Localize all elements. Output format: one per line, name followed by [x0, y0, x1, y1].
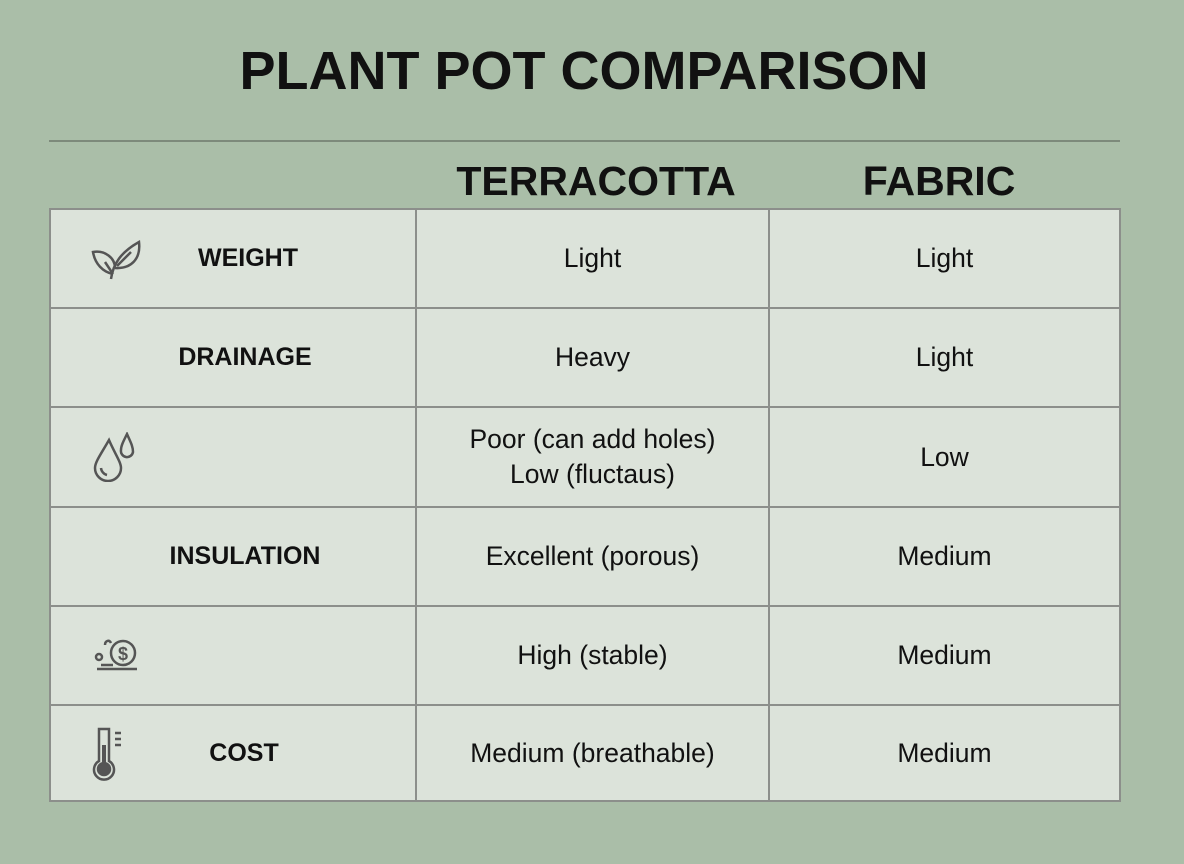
comparison table: Low (fluctaus)	[510, 459, 675, 489]
comparison table: Heavy	[555, 342, 630, 372]
comparison table: Light	[916, 342, 973, 372]
comparison table: Medium	[897, 640, 992, 670]
comparison table: WEIGHT	[198, 244, 298, 272]
title: PLANT POT COMPARISON	[239, 41, 928, 101]
icon: water drops	[94, 432, 134, 482]
comparison table: Medium (breathable)	[470, 738, 715, 768]
comparison table	[49, 208, 1121, 802]
icon: thermometer	[92, 728, 121, 781]
icon: coin: $	[118, 644, 128, 664]
comparison table: Light	[564, 243, 621, 273]
comparison table: Poor (can add holes)	[469, 424, 716, 454]
comparison table: DRAINAGE	[178, 343, 312, 371]
comparison table: High (stable)	[517, 640, 668, 670]
icon: coin	[94, 640, 137, 670]
comparison table: Excellent (porous)	[486, 541, 699, 571]
comparison table: Medium	[897, 738, 992, 768]
comparison table: COST	[209, 738, 279, 766]
comparison table: INSULATION	[170, 542, 320, 570]
column header: fabric: FABRIC	[863, 158, 1015, 204]
comparison table: Medium	[897, 541, 992, 571]
column header: terracotta: TERRACOTTA	[456, 158, 736, 204]
comparison table: Light	[916, 243, 973, 273]
icon: leaf	[92, 240, 140, 280]
comparison table: Low	[920, 442, 969, 472]
